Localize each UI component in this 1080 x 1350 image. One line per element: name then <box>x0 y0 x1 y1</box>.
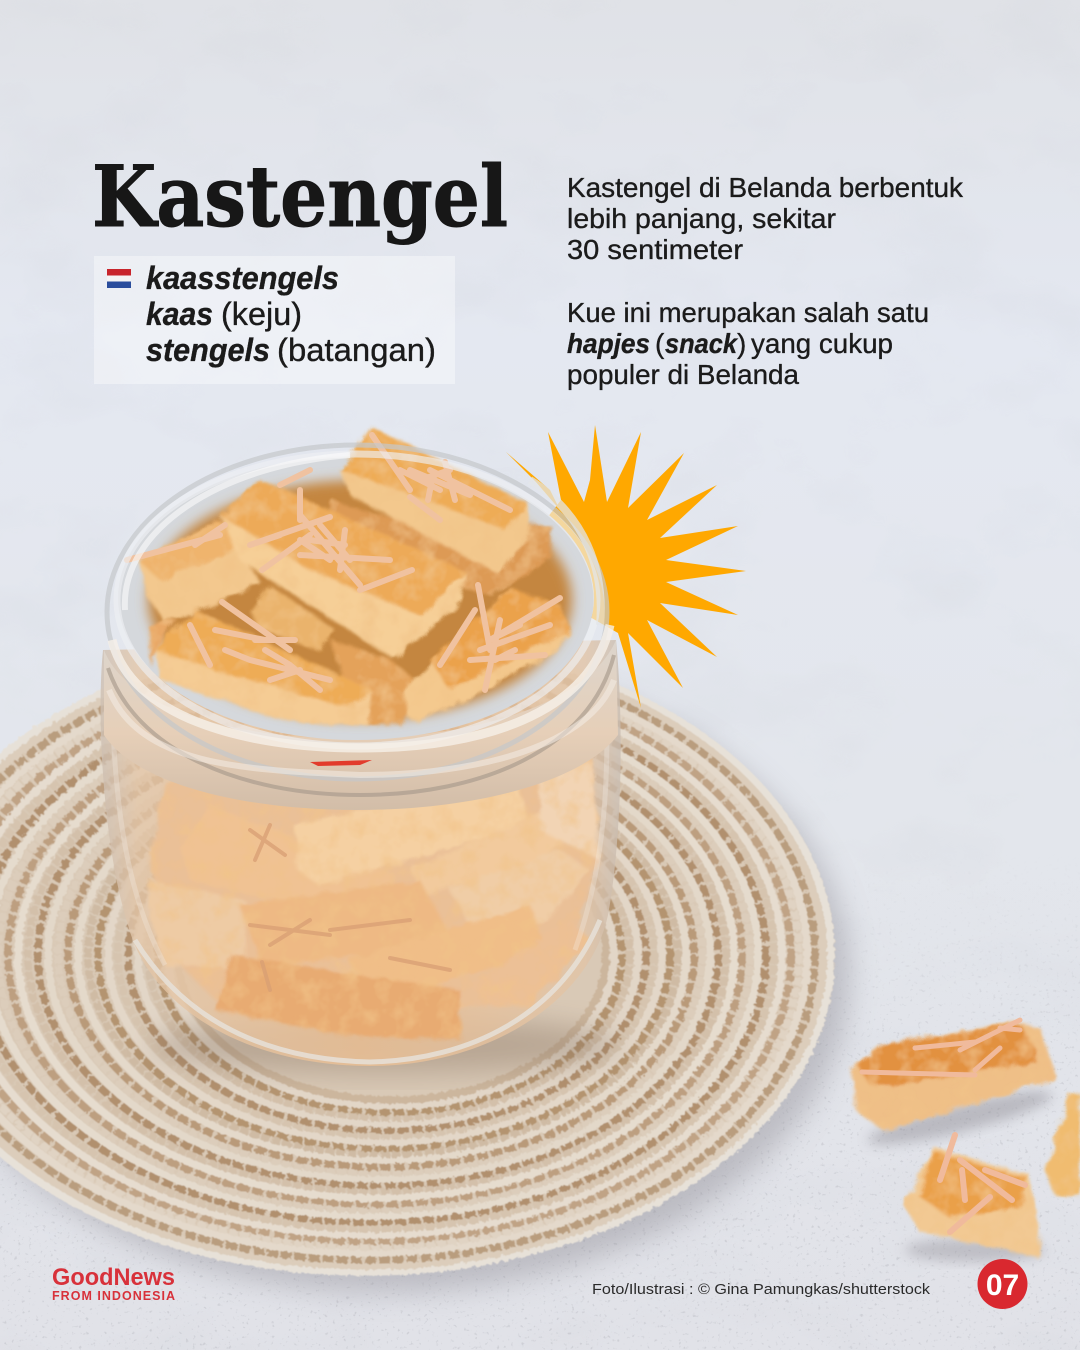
woven round placemat <box>0 635 835 1275</box>
text block: description 2: snack <box>665 328 738 359</box>
back cookies <box>330 500 552 595</box>
text block: description 2: hapjes <box>567 328 650 359</box>
cookie jar <box>101 427 621 1073</box>
logo: GoodNews from Indonesia: GoodNews <box>52 1264 175 1291</box>
yellow sunburst behind jar <box>530 425 746 708</box>
long cookie shadow <box>864 1081 1056 1155</box>
broken cookie cheese <box>940 1135 1025 1232</box>
front-left cookie <box>155 610 372 726</box>
lid thread band <box>104 640 618 810</box>
page number badge <box>978 1259 1028 1309</box>
etymology text: (keju) <box>221 296 302 332</box>
loose cookie: right edge <box>1045 1093 1080 1196</box>
etymology text: stengels <box>146 332 270 368</box>
glass front highlights <box>112 700 607 1062</box>
top-right cookie <box>340 427 530 575</box>
etymology text <box>146 260 436 368</box>
centre cookie <box>220 480 466 660</box>
loose cookie: long <box>850 1020 1057 1155</box>
cheese shreds <box>127 435 560 690</box>
etymology text: (batangan) <box>277 332 436 368</box>
text block: description 1 <box>567 172 964 265</box>
page number badge: 07 <box>986 1269 1019 1302</box>
sunburst small ray <box>506 452 560 510</box>
interior shadow <box>148 480 572 720</box>
logo: GoodNews from Indonesia: FROM INDONESIA <box>52 1289 175 1303</box>
text block: description 2: yang cukup <box>751 328 893 359</box>
text block: description 2: ( <box>655 328 665 359</box>
text block: description 2 <box>567 297 929 390</box>
long cookie cheese <box>862 1020 1020 1075</box>
text block: description 1: lebih panjang, sekitar <box>567 203 836 234</box>
etymology text: kaasstengels <box>146 260 339 296</box>
panel: etymology <box>94 256 455 384</box>
left cookie <box>138 520 262 622</box>
background: textured surface <box>0 918 1080 1350</box>
icon: Netherlands flag <box>107 269 131 288</box>
cheese on lower cookies <box>250 825 450 990</box>
text block: description 2: ) <box>737 328 746 359</box>
jar interior <box>118 456 594 740</box>
jar shadow on mat <box>150 1017 620 1073</box>
text block: description 1: Kastengel di Belanda berbentuk <box>567 172 964 203</box>
etymology text: kaas <box>146 296 213 332</box>
glass rim <box>107 445 614 795</box>
photo credit: Foto/Ilustrasi : © Gina Pamungkas/shutterstock <box>592 1281 931 1298</box>
broken cookie shadow <box>905 1238 1045 1262</box>
text block: description 2: populer di Belanda <box>567 359 799 390</box>
text block: description 2: Kue ini merupakan salah satu <box>567 297 929 328</box>
title: Kastengel <box>92 147 508 246</box>
text block: description 1: 30 sentimeter <box>567 234 743 265</box>
cookies in lower jar <box>150 750 600 1040</box>
loose cookie: broken <box>904 1135 1045 1262</box>
shadow under mat <box>0 657 850 1293</box>
logo: GoodNews from Indonesia <box>52 1264 175 1303</box>
cookies in top of jar <box>138 427 572 726</box>
front-right cookie <box>403 588 572 722</box>
glass body <box>101 640 621 1066</box>
